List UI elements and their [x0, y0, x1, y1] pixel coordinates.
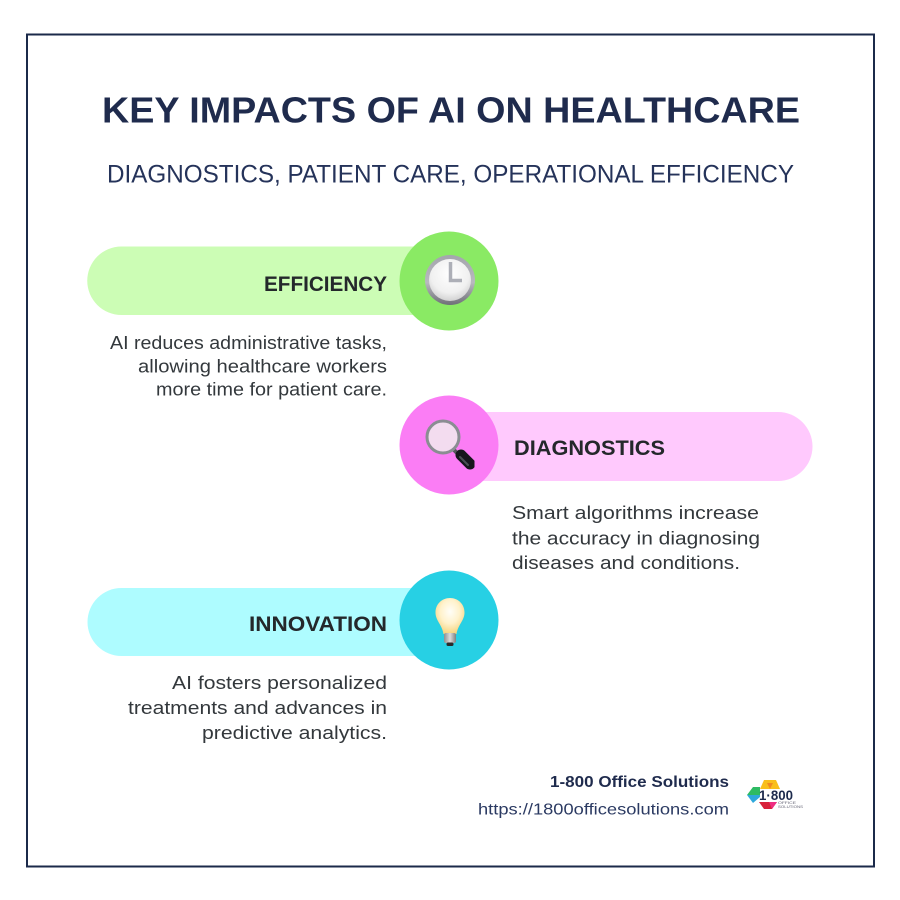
panel: diagnostics [400, 396, 813, 573]
diagnostics pill [450, 412, 813, 481]
efficiency heading: EFFICIENCY [264, 273, 387, 296]
panel: efficiency [87, 232, 498, 400]
panel: innovation [88, 570, 498, 743]
efficiency text: AI reduces administrative tasks, [110, 333, 387, 353]
efficiency text: allowing healthcare workers [138, 356, 387, 376]
icon: light bulb [436, 598, 464, 646]
icon: 1-800 logo: OFFICE [778, 801, 797, 805]
icon: magnifying glass [427, 421, 470, 465]
footer url: https://1800officesolutions.com [478, 802, 729, 818]
innovation text: predictive analytics. [202, 723, 387, 743]
efficiency text [110, 333, 387, 400]
diagnostics text [512, 503, 760, 573]
efficiency text: more time for patient care. [156, 380, 387, 400]
icon: 1-800 logo: SOLUTIONS [778, 805, 804, 809]
innovation pill [88, 588, 450, 656]
innovation heading: INNOVATION [249, 613, 387, 636]
title: KEY IMPACTS OF AI ON HEALTHCARE [102, 90, 800, 130]
diagnostics heading: DIAGNOSTICS [514, 437, 665, 460]
innovation text: AI fosters personalized [172, 673, 387, 693]
efficiency circle [400, 232, 498, 330]
innovation text [128, 673, 387, 743]
efficiency pill [87, 246, 450, 315]
diagnostics text: diseases and conditions. [512, 553, 740, 573]
diagnostics text: Smart algorithms increase [512, 503, 759, 523]
diagnostics text: the accuracy in diagnosing [512, 528, 760, 548]
footer company name: 1-800 Office Solutions [550, 774, 729, 791]
icon: clock [425, 255, 475, 305]
icon: 1-800 logo [747, 780, 804, 809]
innovation text: treatments and advances in [128, 698, 387, 718]
diagnostics circle [400, 396, 498, 494]
subtitle: DIAGNOSTICS, PATIENT CARE, OPERATIONAL EFFICIENCY [107, 160, 794, 188]
icon: 1-800 logo: 1·800 [759, 787, 793, 803]
innovation circle [400, 570, 498, 670]
